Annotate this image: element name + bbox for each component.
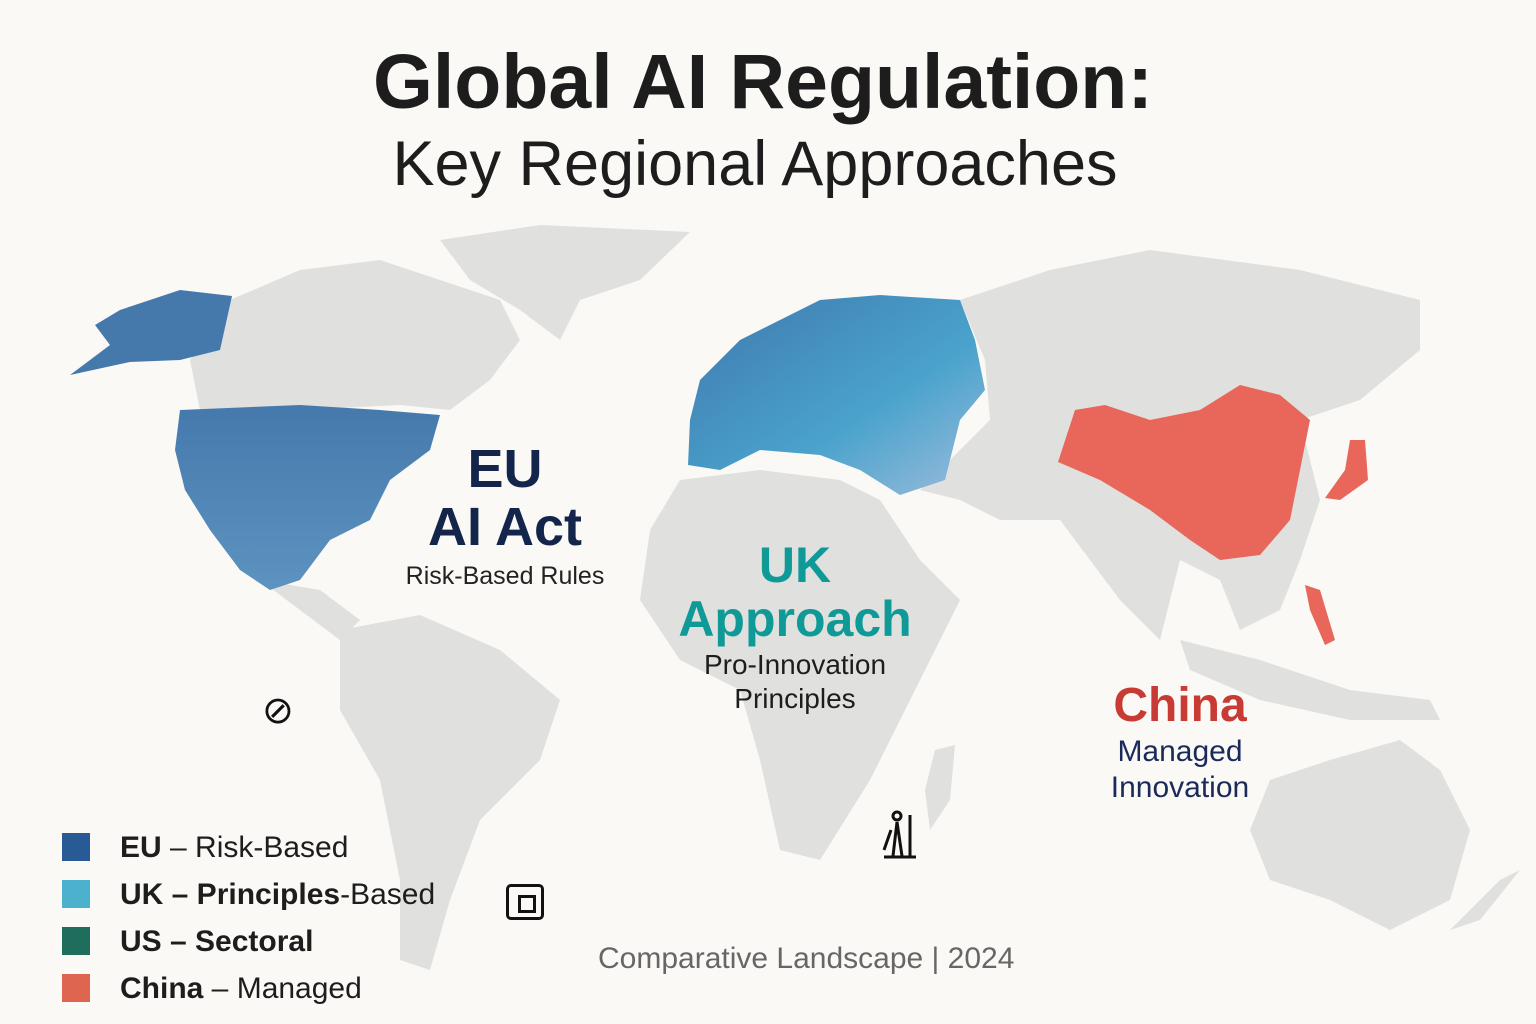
label: UK: Pro-Innovation <box>704 649 886 680</box>
NZ <box>1450 870 1520 930</box>
label: China: Innovation <box>1111 771 1249 804</box>
Madagascar <box>925 745 955 830</box>
icon: box <box>506 884 544 920</box>
Australia <box>1250 740 1470 930</box>
Philippines <box>1305 585 1335 645</box>
label: China: China <box>1113 679 1247 732</box>
US (blue) <box>175 405 440 590</box>
label: UK: Principles <box>734 683 856 714</box>
South America <box>340 615 560 970</box>
label: EU: AI Act <box>428 497 582 557</box>
icon: figure <box>884 812 916 857</box>
legend: UK – Principles-Based <box>120 878 435 911</box>
label: UK: UK <box>759 537 831 593</box>
label: UK <box>678 537 912 714</box>
Europe <box>688 295 985 495</box>
icon: leaf: ⊘ <box>262 690 294 732</box>
legend <box>62 831 435 1005</box>
label: China: Managed <box>1117 735 1243 768</box>
label: EU: Risk-Based Rules <box>406 562 604 590</box>
Alaska <box>70 290 232 375</box>
Canada <box>190 260 520 410</box>
legend: US – Sectoral <box>120 925 313 958</box>
footer: Comparative Landscape | 2024 <box>598 942 1014 975</box>
Japan <box>1325 440 1368 500</box>
label: EU: EU <box>467 439 542 499</box>
label: UK: Approach <box>678 591 912 647</box>
label: China <box>1111 679 1249 804</box>
Asia <box>920 250 1420 640</box>
title: Global AI Regulation: <box>373 39 1153 125</box>
Greenland <box>440 225 690 340</box>
legend: EU – Risk-Based <box>120 831 348 864</box>
Indonesia <box>1180 640 1440 720</box>
China <box>1058 385 1310 560</box>
Africa <box>640 470 960 860</box>
legend: China – Managed <box>120 972 362 1005</box>
label: EU <box>406 439 604 590</box>
Central America <box>260 580 360 640</box>
subtitle: Key Regional Approaches <box>392 129 1118 199</box>
